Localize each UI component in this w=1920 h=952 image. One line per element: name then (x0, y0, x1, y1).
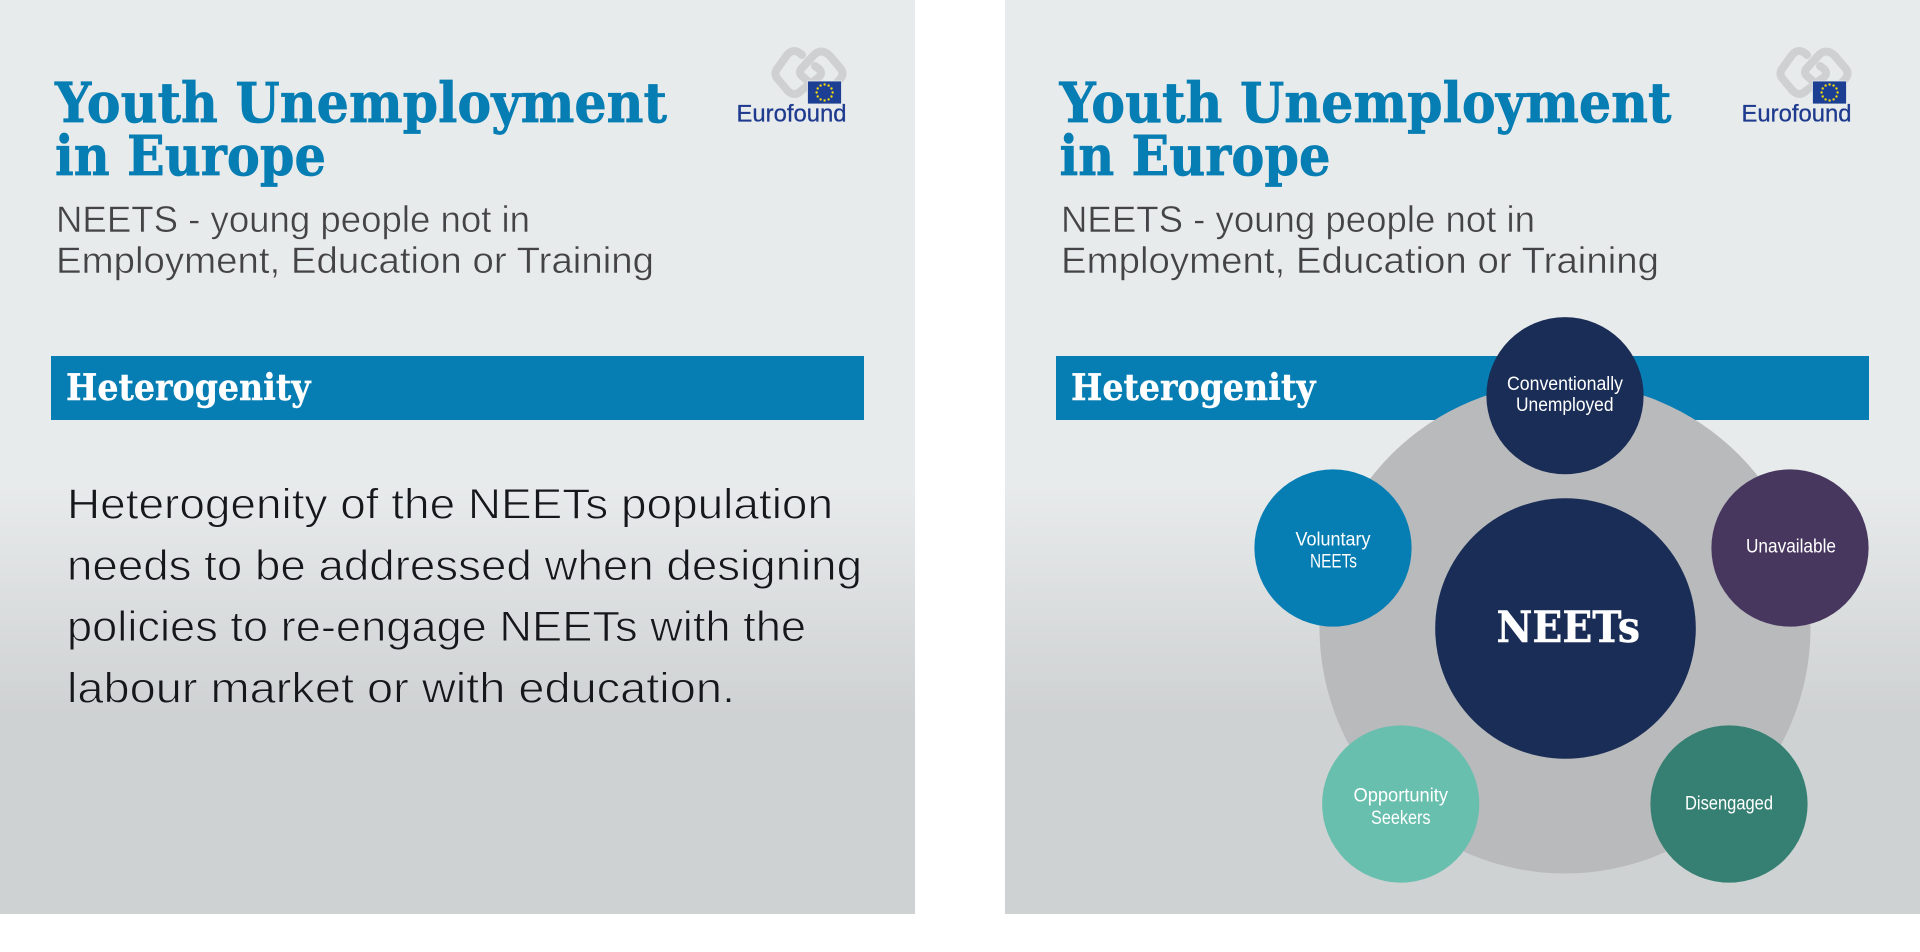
circle: Opportunity Seekers (1322, 725, 1479, 883)
body text: labour market or with education. (67, 664, 735, 712)
circle: Opportunity Seekers: Seekers (1371, 808, 1430, 829)
circle: Disengaged: Disengaged (1685, 794, 1773, 814)
title: right (1059, 70, 1672, 188)
circle: NEETs centre: NEETs (1496, 603, 1640, 653)
body text: needs to be addressed when designing (67, 542, 862, 590)
heading bar: right (1056, 356, 1869, 420)
subtitle: left (56, 199, 654, 281)
subtitle: left: Employment, Education or Training (56, 240, 654, 281)
circle: Opportunity Seekers: Opportunity (1354, 786, 1448, 806)
body text: Heterogenity of the NEETs population (67, 480, 833, 528)
circle: Conventionally Unemployed: Unemployed (1516, 395, 1614, 416)
circle: Unavailable: Unavailable (1746, 536, 1836, 558)
circle: Voluntary NEETs: NEETs (1310, 552, 1357, 572)
circle: NEETs centre (1435, 498, 1696, 759)
subtitle: right (1061, 199, 1659, 281)
logo wordmark: Eurofound (736, 100, 846, 128)
title: right: in Europe (1060, 123, 1330, 188)
circle: Conventionally Unemployed (1486, 317, 1644, 474)
background circle (1320, 382, 1810, 874)
diagram: NEETs circles (1254, 317, 1869, 883)
title: right: Youth Unemployment (1059, 70, 1672, 135)
heading bar: right: Heterogenity (1071, 367, 1316, 409)
heading bar: left (51, 356, 864, 420)
icon: EU flag (808, 81, 842, 104)
circle: Unavailable (1711, 469, 1869, 627)
title: left: in Europe (55, 123, 326, 188)
body text (67, 480, 862, 712)
title: left: Youth Unemployment (54, 70, 668, 135)
circle: Voluntary NEETs (1254, 469, 1412, 627)
panel: left card (0, 0, 915, 914)
heading bar: left: Heterogenity (66, 367, 311, 409)
icon: chain links (776, 51, 842, 95)
icon: EU flag (1812, 81, 1846, 104)
subtitle: right: NEETS - young people not in (1061, 199, 1535, 240)
logo: Eurofound left (736, 51, 846, 128)
logo: Eurofound right (1742, 51, 1852, 128)
logo wordmark: Eurofound (1742, 100, 1852, 128)
circle: Voluntary NEETs: Voluntary (1296, 530, 1371, 550)
panel: right card (1005, 0, 1920, 914)
subtitle: right: Employment, Education or Training (1061, 240, 1659, 281)
title: left (54, 70, 668, 188)
subtitle: left: NEETS - young people not in (56, 199, 530, 240)
circle: Conventionally Unemployed: Conventionally (1507, 374, 1623, 395)
body text: policies to re-engage NEETs with the (67, 603, 806, 651)
icon: chain links (1780, 51, 1848, 95)
circle: Disengaged (1650, 725, 1808, 883)
